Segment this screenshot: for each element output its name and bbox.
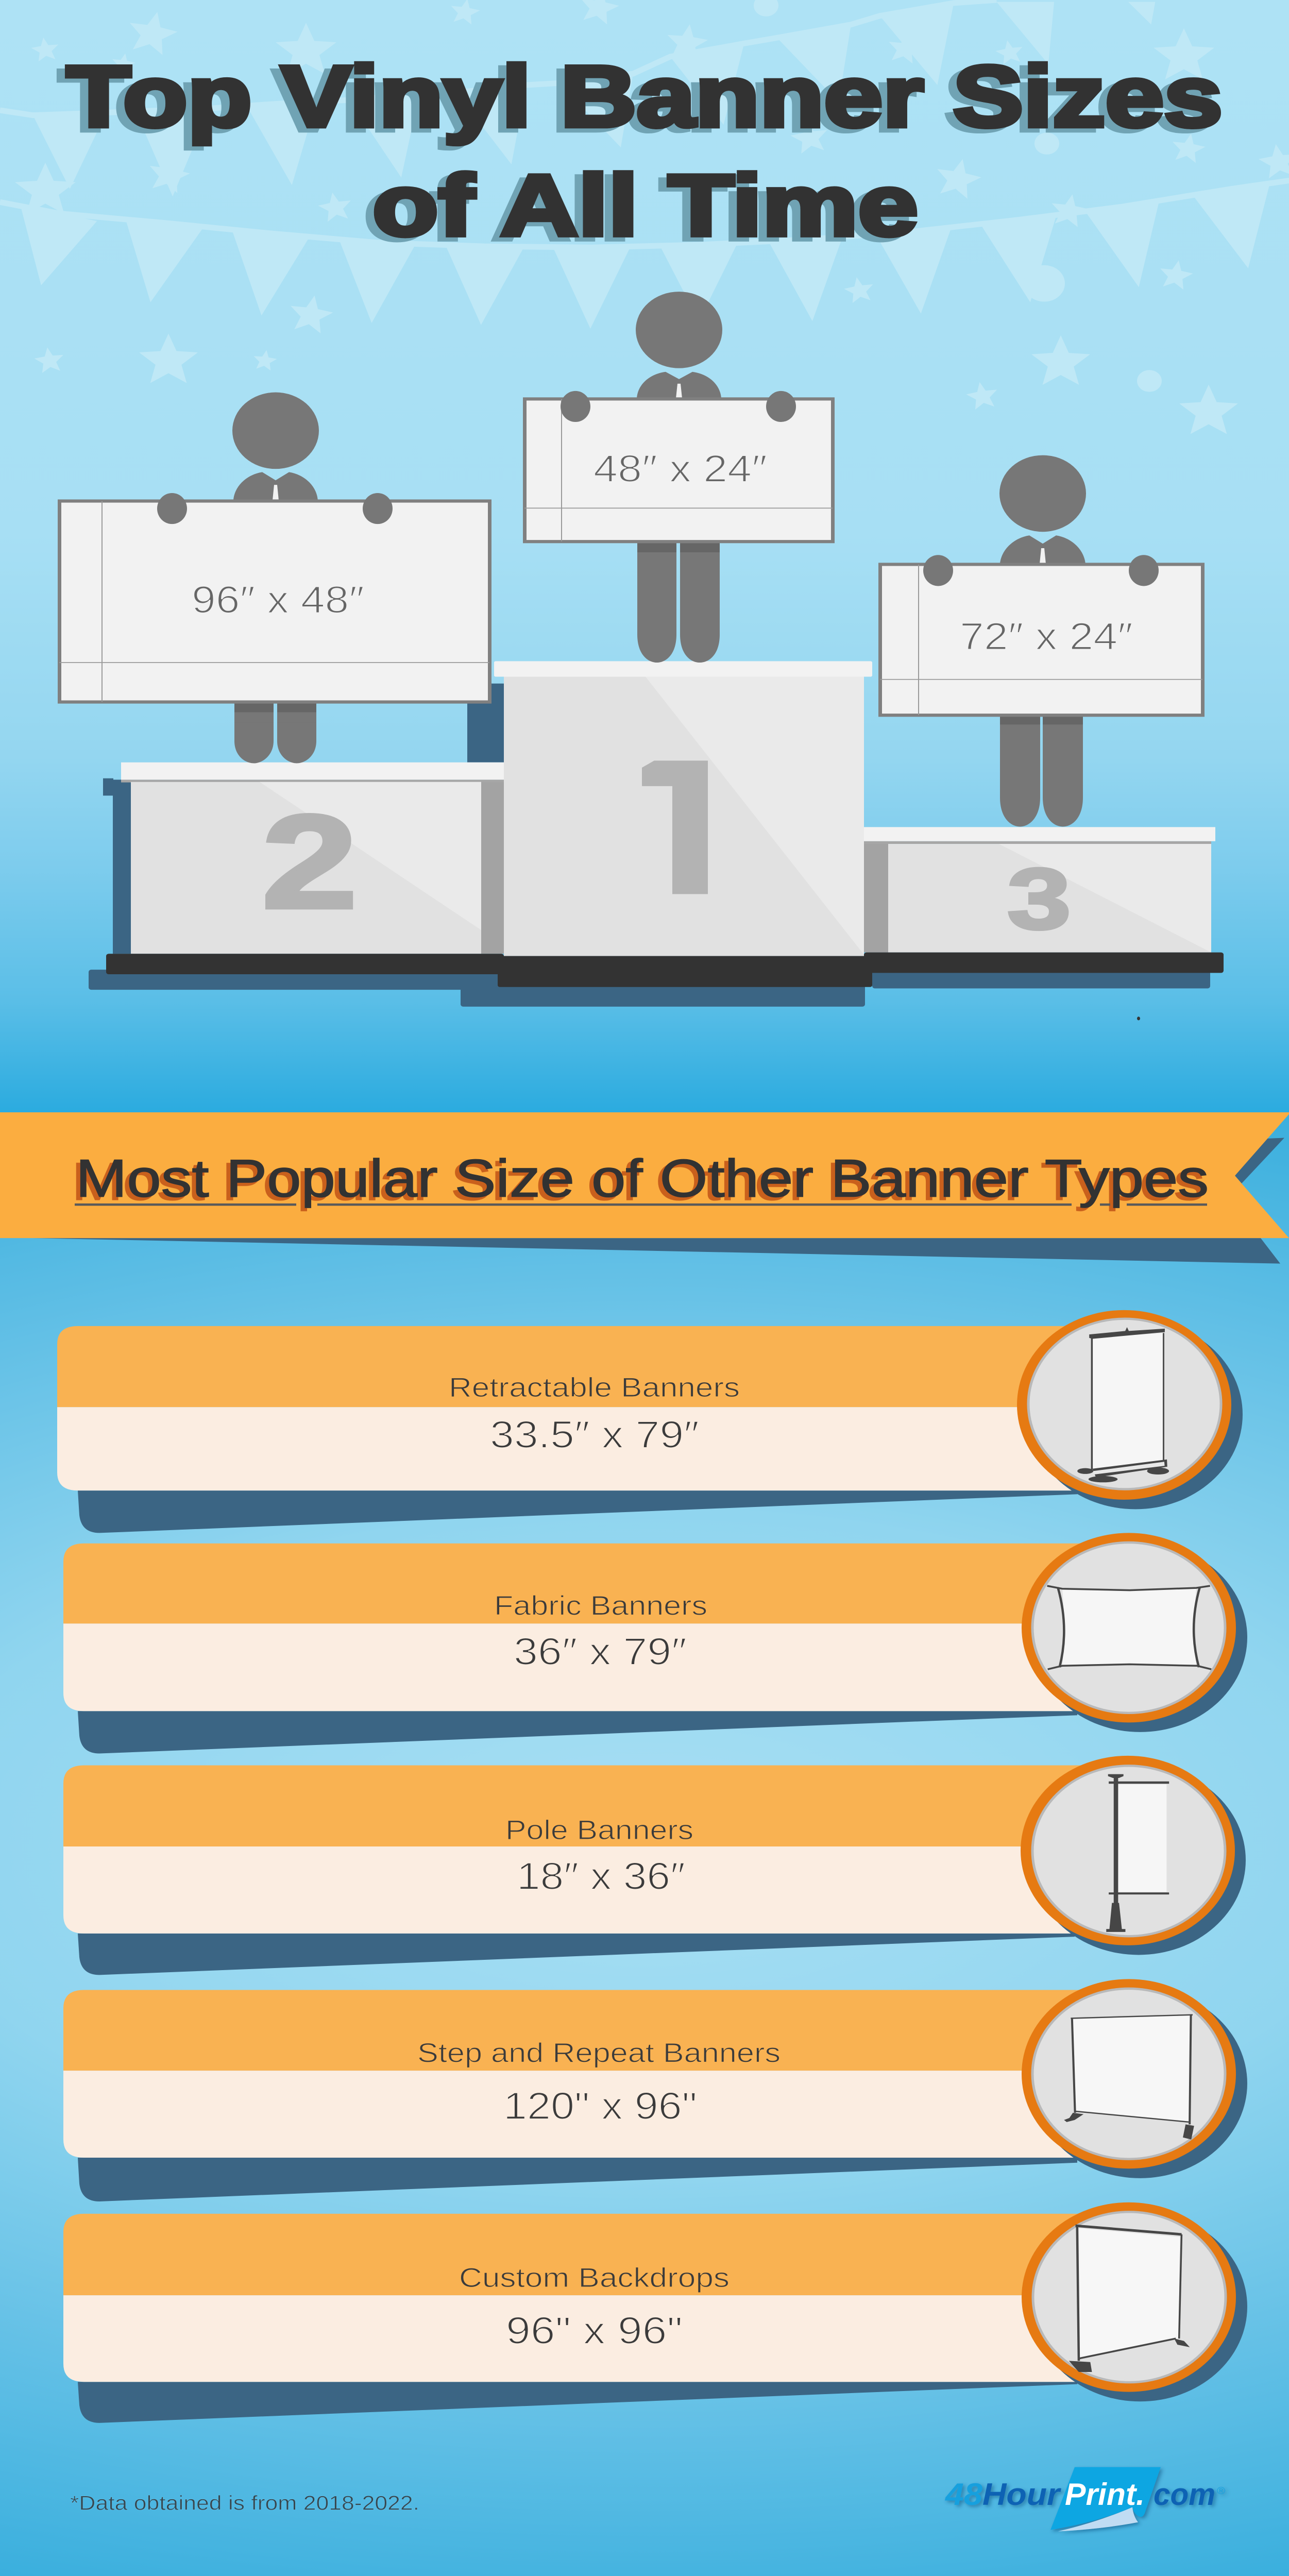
bar body	[63, 1623, 1108, 1711]
person: third place holding sign	[880, 455, 1202, 826]
bar header	[63, 2214, 1108, 2295]
size: 120" x 96"	[503, 2084, 697, 2127]
size: 33.5″ x 79″	[490, 1413, 699, 1456]
section ribbon	[0, 1112, 1289, 1264]
sign size label: 72″ x 24″	[960, 615, 1133, 657]
number 3: 3	[1007, 851, 1071, 947]
bar body	[63, 2071, 1108, 2158]
bar body	[63, 1846, 1108, 1934]
icon: step and repeat stand	[1022, 1979, 1247, 2178]
bar shadow	[78, 1934, 1075, 1975]
title: Top Vinyl Banner Sizes	[66, 48, 1223, 145]
podium shadows	[89, 684, 1210, 1007]
title: of All Time	[372, 158, 918, 254]
label: Step and Repeat Banners	[417, 2038, 781, 2068]
sign size label: 48″ x 24″	[593, 447, 767, 490]
decorative bunting and stars	[0, 0, 1289, 434]
bar header	[63, 1765, 1108, 1846]
bar shadow	[78, 2158, 1077, 2201]
icon: retractable banner stand	[1017, 1310, 1243, 1509]
bar body	[63, 2295, 1108, 2382]
logo wordmark: Hour	[982, 2477, 1061, 2512]
footnote: *Data obtained is from 2018-2022.	[70, 2492, 419, 2514]
number 1: 1	[626, 723, 750, 942]
podium: second place	[106, 762, 504, 974]
background: top sky section	[0, 0, 1289, 1112]
bar body	[57, 1407, 1108, 1490]
bar header	[63, 1544, 1108, 1623]
logo wordmark: com	[1154, 2477, 1215, 2512]
podium: first place	[494, 661, 872, 987]
size: 96" x 96"	[506, 2309, 683, 2352]
logo sheet	[1050, 2467, 1161, 2530]
row: step and repeat banners	[63, 1979, 1247, 2201]
sign size label: 96″ x 48″	[192, 578, 364, 621]
number 2: 2	[262, 788, 358, 936]
size: 36″ x 79″	[514, 1630, 687, 1673]
stray dot	[1137, 1016, 1140, 1020]
bar header	[63, 1990, 1108, 2071]
logo: 48HourPrint.com	[944, 2467, 1225, 2531]
label: Fabric Banners	[494, 1591, 707, 1621]
row: fabric banners	[63, 1533, 1247, 1754]
ribbon heading: Most Popular Size of Other Banner Types	[76, 1149, 1209, 1208]
logo wordmark: 48	[944, 2477, 982, 2512]
bar shadow	[78, 1711, 1077, 1754]
title	[66, 48, 1223, 254]
person: first place holding sign	[524, 292, 833, 663]
bar shadow	[78, 2382, 1077, 2423]
bar shadow	[78, 1490, 1077, 1533]
row: pole banners	[63, 1756, 1246, 1975]
bar header	[57, 1326, 1108, 1407]
size: 18″ x 36″	[517, 1855, 685, 1897]
row: retractable banners	[57, 1310, 1243, 1533]
logo wordmark	[944, 2477, 1215, 2512]
podium: third place	[864, 827, 1224, 973]
row: custom backdrops	[63, 2202, 1247, 2423]
background: lower section	[0, 1112, 1289, 2576]
logo wordmark: Print.	[1065, 2477, 1145, 2512]
person: second place holding sign	[59, 393, 489, 764]
logo: 48HourPrint.com: ®	[1217, 2485, 1225, 2496]
icon: fabric banner	[1022, 1533, 1247, 1732]
icon: pole banner	[1021, 1756, 1246, 1955]
label: Custom Backdrops	[459, 2263, 730, 2293]
label: Retractable Banners	[449, 1372, 740, 1403]
icon: custom backdrop stand	[1022, 2202, 1247, 2401]
label: Pole Banners	[505, 1815, 693, 1845]
